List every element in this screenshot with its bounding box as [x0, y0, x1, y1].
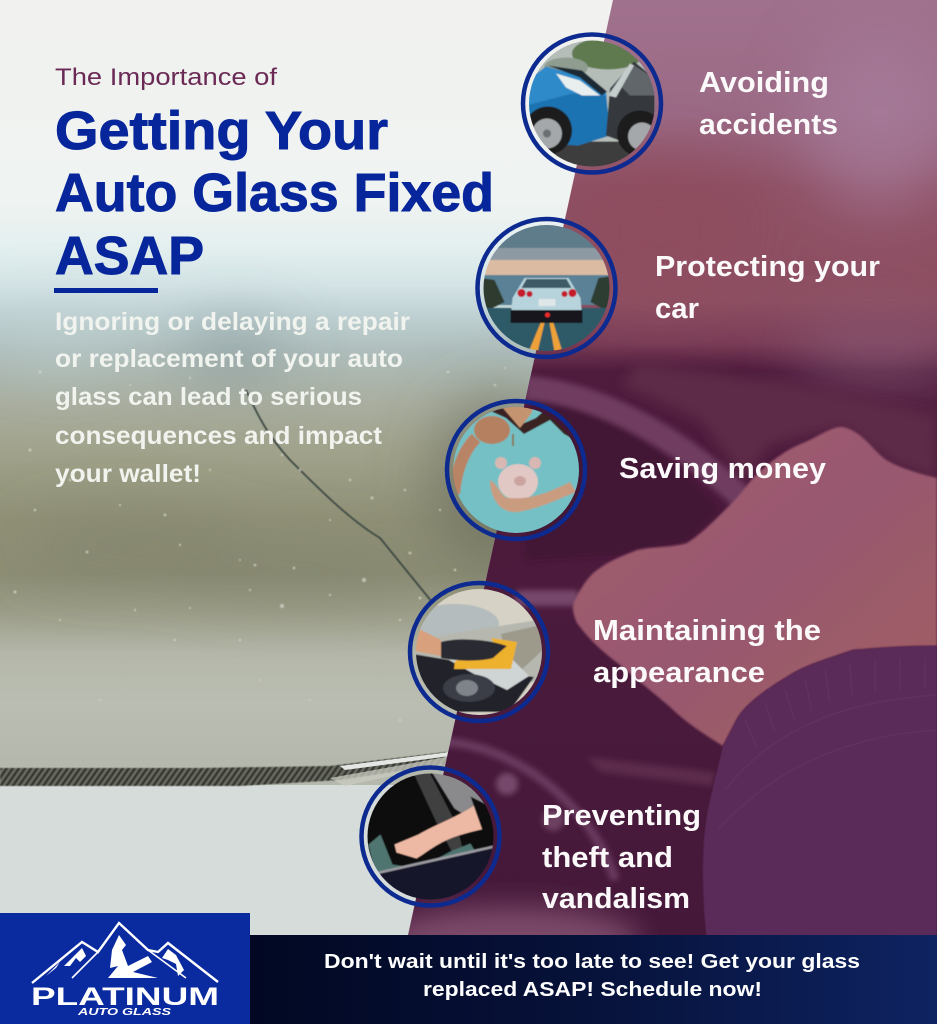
item: maintaining the appearance: [409, 582, 821, 722]
label: accidents: [699, 109, 838, 141]
label: [655, 251, 880, 325]
windshield wiper band: [0, 751, 448, 935]
label: appearance: [593, 657, 765, 689]
label: [593, 615, 821, 689]
icon: mountains: [32, 923, 218, 983]
call-to-action text: replaced ASAP! Schedule now!: [423, 979, 762, 1001]
intro paragraph: Ignoring or delaying a repair: [55, 308, 410, 336]
eyebrow: The Importance of: [55, 64, 277, 91]
label: [699, 67, 838, 141]
label: theft and: [542, 842, 673, 874]
label: [542, 800, 701, 915]
panel: right background, tinted driver's hand on steering wheel: [380, 0, 937, 974]
call-to-action text: Don't wait until it's too late to see! Get your glass: [324, 951, 860, 973]
call-to-action text: [324, 951, 860, 1001]
icon: piggy bank photo: [446, 400, 586, 540]
sleeve: [703, 646, 937, 940]
label: Avoiding: [699, 67, 829, 99]
dashboard gauges: [445, 742, 715, 880]
item: preventing theft and vandalism: [360, 766, 701, 915]
windshield crack: [246, 390, 432, 602]
label: Saving money: [619, 453, 826, 485]
logo panel: Platinum Auto Glass: [0, 913, 250, 1024]
intro paragraph: [55, 308, 410, 488]
glass specks: [13, 359, 511, 721]
logo wordmark: PLATINUM: [31, 983, 219, 1011]
intro paragraph: glass can lead to serious: [55, 383, 362, 411]
icon: polishing car photo: [409, 582, 549, 722]
lap shading: [408, 892, 648, 935]
intro paragraph: consequences and impact: [55, 422, 383, 450]
label: car: [655, 293, 699, 325]
title underline: [54, 288, 158, 293]
logo tagline: AUTO GLASS: [77, 1007, 171, 1018]
intro paragraph: your wallet!: [55, 460, 201, 488]
label: Protecting your: [655, 251, 880, 283]
hand: [573, 427, 937, 746]
footer call-to-action bar: [240, 935, 937, 1024]
label: vandalism: [542, 883, 690, 915]
title block: [54, 64, 494, 293]
item: avoiding accidents: [522, 34, 838, 174]
label: Maintaining the: [593, 615, 821, 647]
headline: Auto Glass Fixed: [55, 163, 494, 223]
icon: car crash photo: [522, 34, 663, 174]
icon: car break-in photo: [360, 766, 500, 906]
headline: Getting Your: [55, 101, 388, 161]
steering wheel: [515, 362, 937, 606]
item: protecting your car: [476, 218, 880, 358]
item: saving money: [446, 400, 826, 540]
label: Preventing: [542, 800, 701, 832]
intro paragraph: or replacement of your auto: [55, 345, 403, 373]
icon: sports car on road photo: [476, 218, 616, 358]
headline: ASAP: [55, 226, 204, 286]
panel: left background, cracked windshield photo: [0, 226, 562, 935]
headline: [55, 101, 494, 286]
